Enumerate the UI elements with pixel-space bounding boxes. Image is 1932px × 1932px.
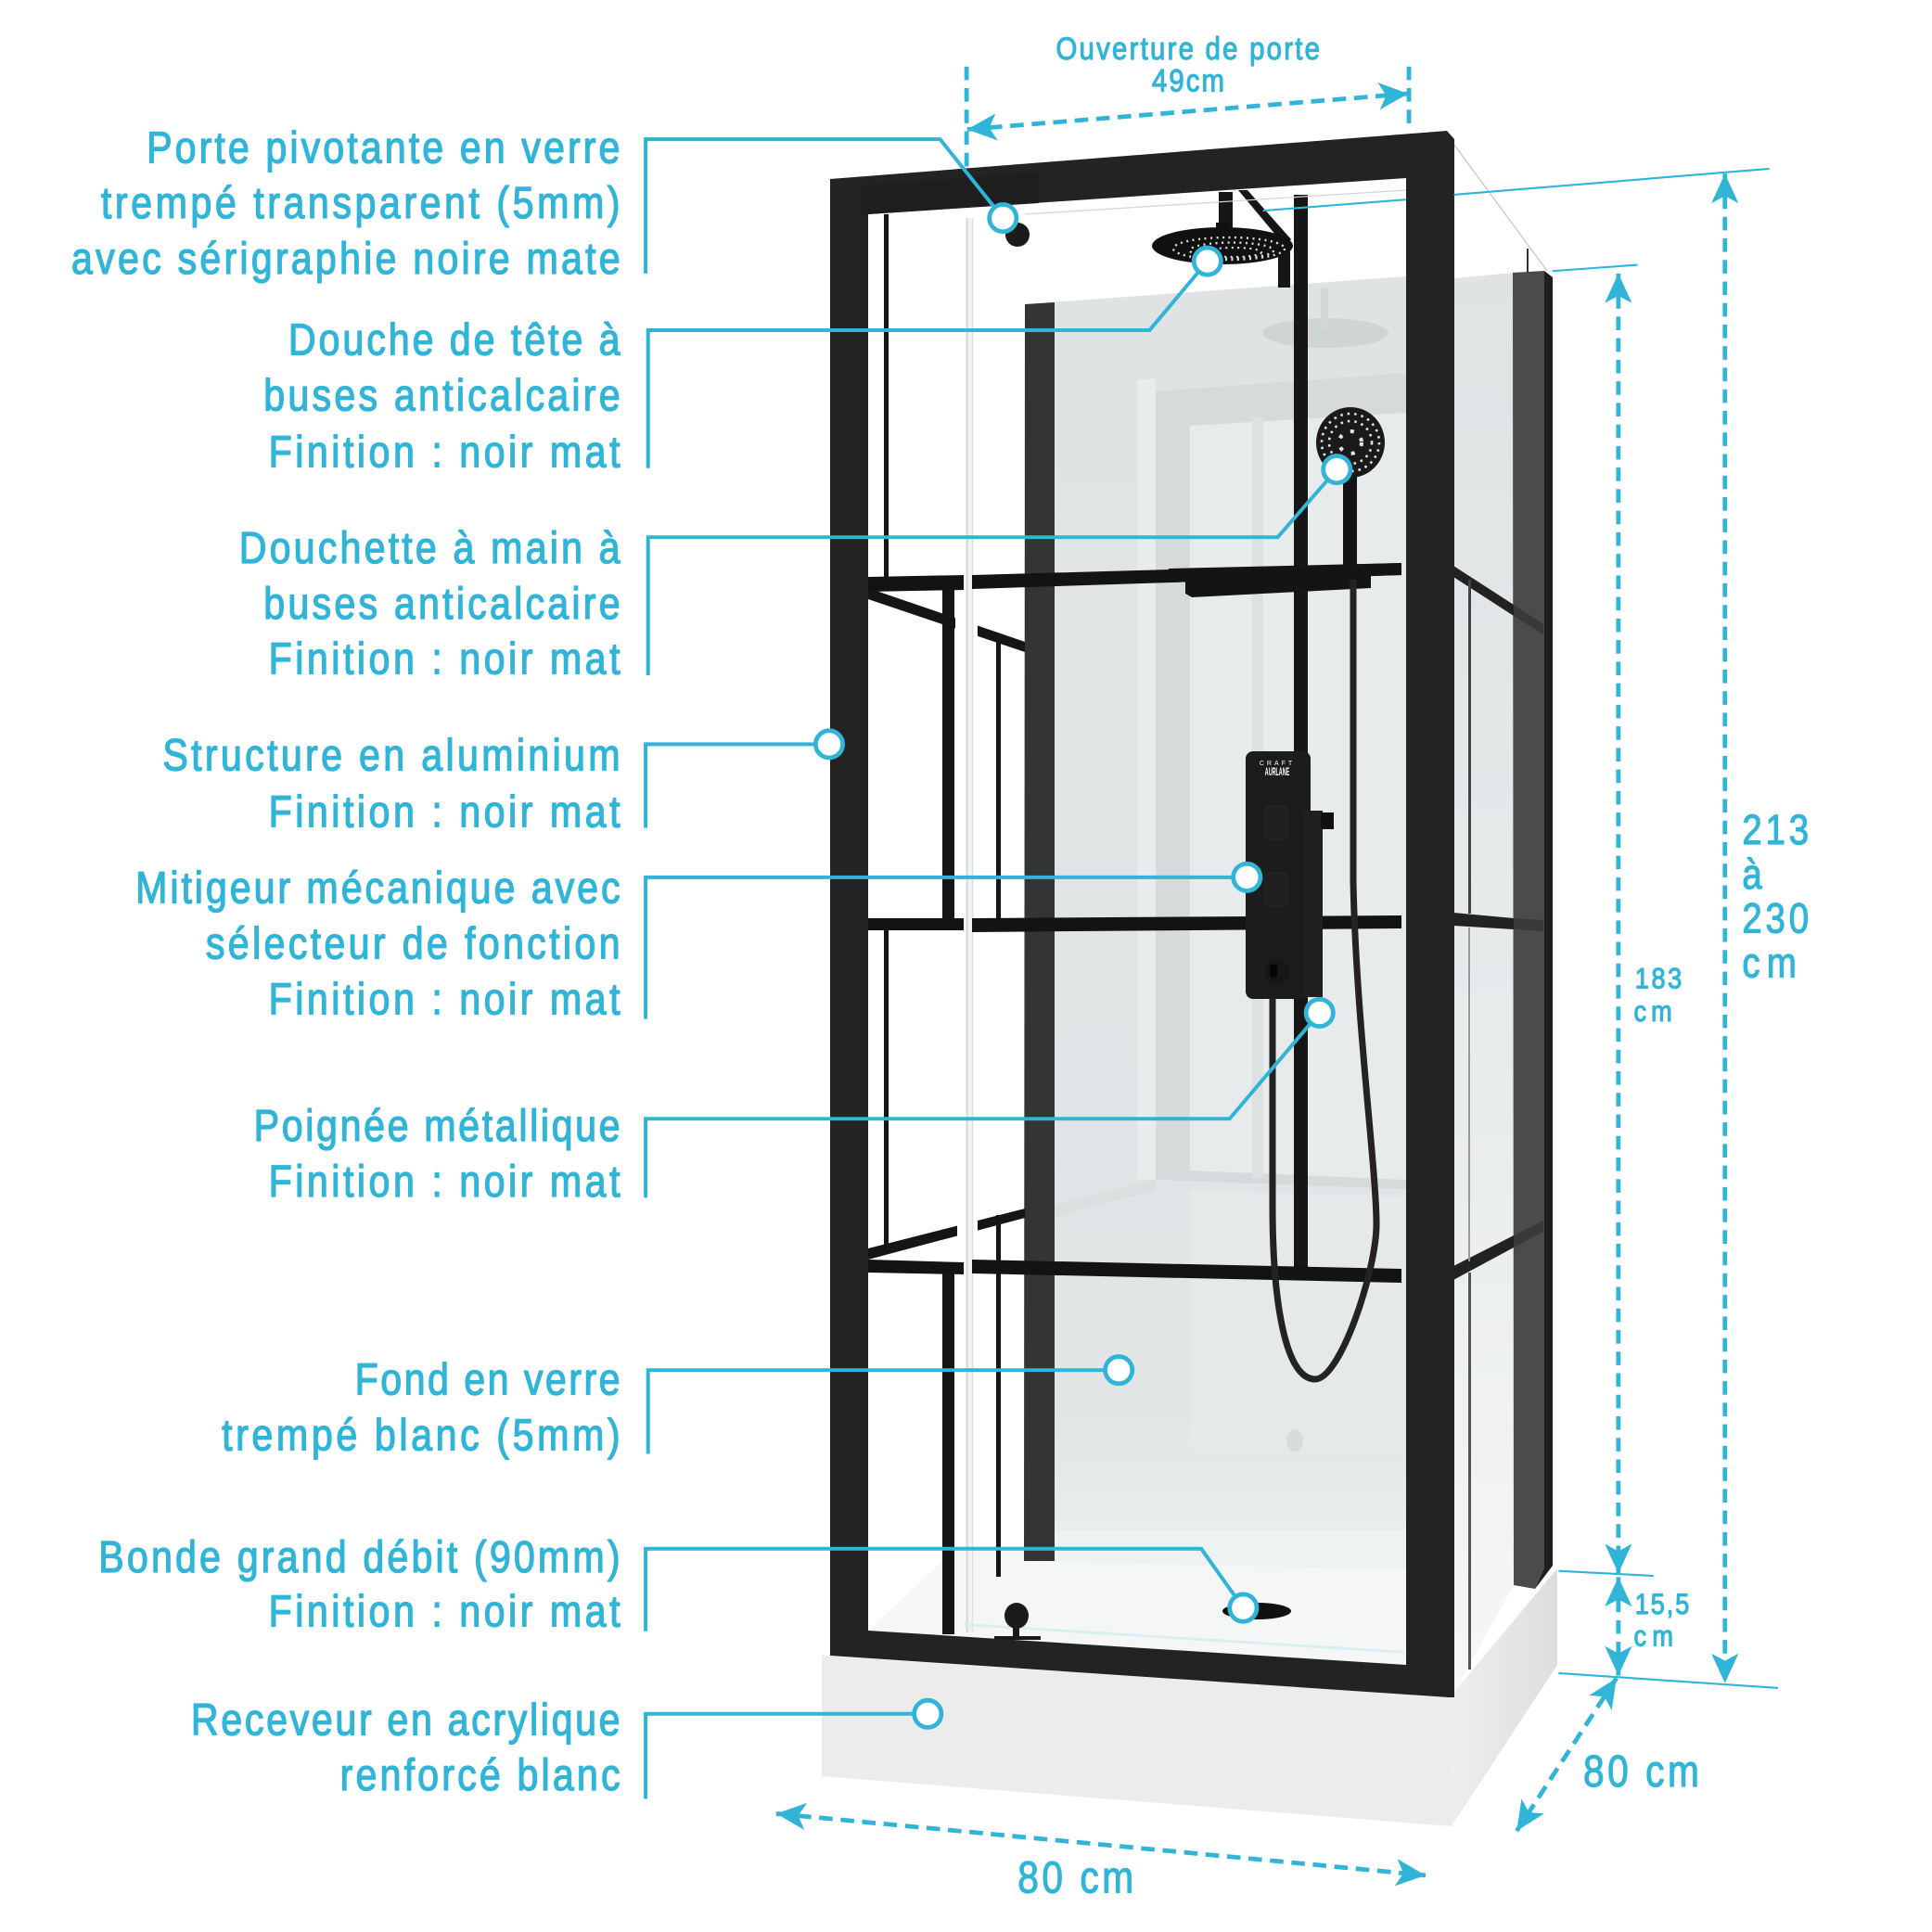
callout: bonde [98, 1531, 1257, 1636]
dimension: height 183 cm [1553, 265, 1682, 1573]
callout: douchette à main: Finition : noir mat [269, 633, 621, 684]
callout: bonde: Finition : noir mat [269, 1585, 621, 1636]
shelf [1169, 563, 1401, 597]
callout: structure: Finition : noir mat [269, 786, 621, 837]
mixer plate [1246, 751, 1334, 999]
dimension: height 213 to 230 cm: à [1742, 851, 1762, 897]
dimension: width 80 cm [776, 1813, 1426, 1902]
callout: receveur: Receveur en acrylique [191, 1694, 621, 1745]
callout: structure: Structure en aluminium [162, 729, 621, 780]
dimension: door opening: Ouverture de porte [1056, 31, 1320, 66]
callout: bonde: Bonde grand débit (90mm) [98, 1531, 621, 1582]
callout: poignée [254, 999, 1333, 1207]
dimension: height 213 to 230 cm: 230 [1742, 895, 1809, 941]
dimension: tray height 15,5 cm: 15,5 [1635, 1588, 1689, 1621]
dimension: height 183 cm: cm [1633, 995, 1672, 1029]
horizontal door bars [868, 563, 1401, 1283]
icon: rain shower head [1152, 223, 1293, 264]
callout: poignée: Poignée métallique [254, 1100, 621, 1151]
callout: douchette à main [239, 456, 1350, 684]
callout: mitigeur: sélecteur de fonction [206, 917, 621, 968]
callout: douche de tête: buses anticalcaire [263, 369, 621, 420]
callout: porte pivotante [71, 122, 1017, 284]
shower hose [1273, 580, 1376, 1379]
shower tray: white acrylic base [822, 1547, 1557, 1826]
callout: porte pivotante: Porte pivotante en verre [147, 122, 620, 173]
callout: douche de tête: Douche de tête à [288, 313, 621, 365]
dimension: depth 80 cm [1516, 1678, 1699, 1831]
door edge glass [955, 218, 1404, 1654]
shower column and arm [1219, 190, 1308, 1271]
callout: mitigeur: Finition : noir mat [269, 973, 621, 1024]
dimension: height 213 to 230 cm: cm [1742, 939, 1797, 986]
icon: bottom pivot hinge [994, 1603, 1041, 1640]
callout: douchette à main: buses anticalcaire [263, 578, 621, 629]
callout: douche de tête: Finition : noir mat [269, 426, 621, 477]
icon: hand shower [1316, 407, 1385, 568]
callout: fond en verre: Fond en verre [355, 1354, 621, 1405]
callout: fond en verre: trempé blanc (5mm) [222, 1409, 621, 1460]
icon: drain [1222, 1603, 1291, 1619]
callout: receveur: renforcé blanc [340, 1749, 621, 1800]
callout: douchette à main: Douchette à main à [239, 522, 621, 573]
dimension: depth 80 cm: 80 cm [1583, 1747, 1699, 1797]
dimension: height 213 to 230 cm [1263, 169, 1809, 1683]
right side panel [1453, 144, 1553, 1693]
callout: fond en verre [222, 1354, 1132, 1460]
icon: top pivot hinge [1005, 223, 1030, 247]
callout: douche de tête [263, 248, 1221, 477]
dimension: height 183 cm: 183 [1635, 962, 1682, 995]
callout: poignée: Finition : noir mat [269, 1156, 621, 1207]
dimension: door opening [966, 31, 1409, 168]
dimension: height 213 to 230 cm: 213 [1742, 806, 1809, 853]
callout: porte pivotante: trempé transparent (5mm) [101, 177, 621, 228]
back wall: white tempered glass [1025, 276, 1406, 1569]
mixer plate: CRAFT [1260, 761, 1295, 767]
dimension: tray height 15,5 cm [1558, 1571, 1778, 1688]
dimension: tray height 15,5 cm: cm [1633, 1620, 1673, 1653]
callout: structure [162, 729, 843, 837]
front aluminium frame [830, 131, 1454, 1697]
callout: receveur [191, 1694, 941, 1800]
left thin verticals and diagonals of door silkscreen [868, 214, 1025, 1634]
callout: mitigeur: Mitigeur mécanique avec [135, 863, 621, 913]
back left post [1024, 302, 1055, 1561]
dimension: width 80 cm: 80 cm [1017, 1853, 1133, 1902]
callout: mitigeur [135, 863, 1260, 1024]
dimension: door opening: 49cm [1152, 62, 1224, 98]
callout: porte pivotante: avec sérigraphie noire mate [71, 233, 621, 284]
shower cabin illustration [822, 131, 1557, 1826]
mixer plate: AURLANE [1265, 766, 1289, 778]
